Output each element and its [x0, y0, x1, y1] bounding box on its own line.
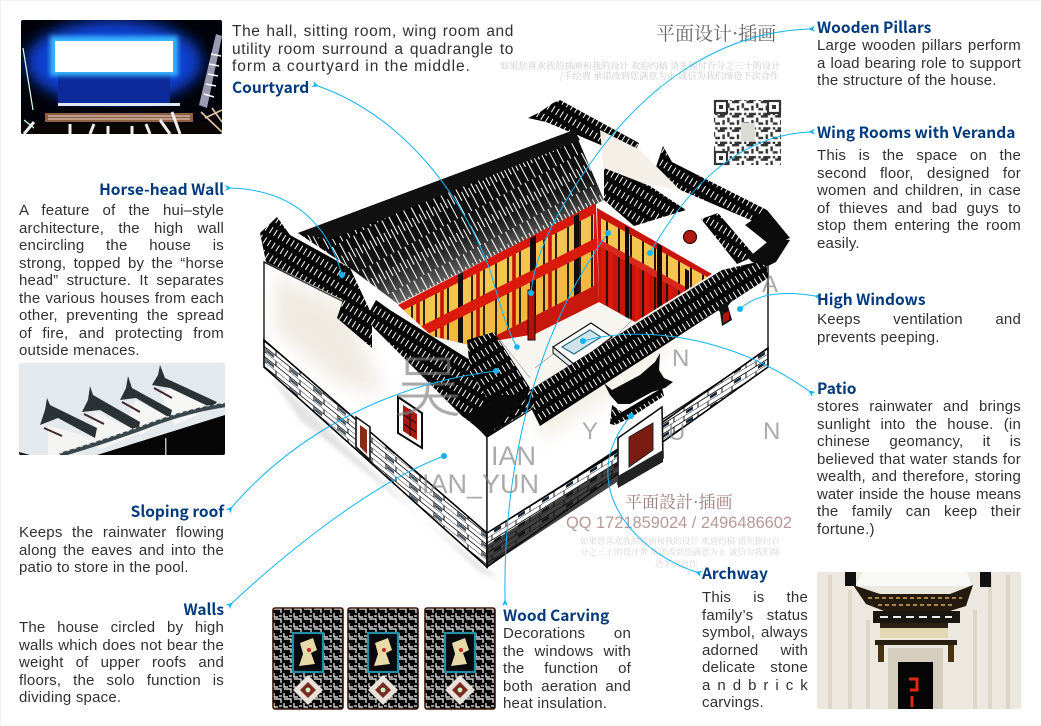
back rear gable strip	[528, 100, 639, 158]
leader lines and arrows	[231, 29, 815, 603]
watermark: top studio name: 如果您喜欢我的插画和我的设计 欢迎约稿 请先预付百分之三十的设计	[500, 58, 780, 72]
right wall	[487, 262, 768, 535]
watermark: top studio name: /手绘费 承诺改到您满意为止 诚信为我们缔造下次合作	[560, 68, 779, 82]
text: horse-head wall: head” structure. It separates	[19, 272, 224, 289]
text: walls: floors, the solo function is	[19, 672, 224, 689]
back right gable strip	[632, 146, 767, 222]
archway on right wall	[604, 353, 673, 488]
watermark: top studio name	[500, 19, 780, 82]
text: sloping roof: patio to store in the pool.	[19, 559, 189, 576]
text: patio: fortune.)	[817, 521, 875, 538]
wall weathering	[275, 275, 700, 440]
text: horse-head wall: architecture, the high wall	[19, 220, 224, 237]
watermark: contact block	[566, 488, 792, 570]
text: archway: a n d b r i c k	[702, 677, 808, 694]
house illustration	[260, 100, 790, 580]
watermark: contact block: 如果您喜欢我的插画和我的设计 欢迎约稿 请先预付百	[580, 535, 780, 547]
corner slope roof	[467, 332, 530, 420]
text: wing rooms: women and children, in case	[817, 182, 1021, 199]
text: archway: This is the	[702, 589, 808, 606]
heading: archway: Archway	[702, 562, 768, 584]
text: sloping roof: along the eaves and into the	[19, 542, 224, 559]
watermark: large letters over house: N	[672, 345, 689, 372]
text: patio: the family can keep their	[817, 503, 1021, 520]
text: sloping roof: Keeps the rainwater flowing	[19, 524, 224, 541]
text: walls: weight of upper roofs and	[19, 654, 224, 671]
horse head right end	[748, 238, 790, 266]
text: patio	[817, 398, 1021, 538]
arrow: courtyard	[318, 86, 517, 347]
arrow: sloping roof	[232, 371, 496, 507]
text: wing rooms: of thieves and bad guys to	[817, 200, 1021, 217]
arrow: wood carving	[505, 233, 608, 600]
main roof hatching	[298, 130, 604, 304]
right brick base	[487, 348, 768, 567]
heading: wing rooms: Wing Rooms with Veranda	[817, 121, 1015, 143]
heading: courtyard: Courtyard	[232, 76, 309, 98]
heading: wooden pillars: Wooden Pillars	[817, 16, 931, 38]
side gallery facade	[597, 208, 712, 322]
text: archway: adorned with	[702, 642, 808, 659]
text: wing rooms: second floor, designed for	[817, 165, 1021, 182]
arrow: horse-head wall	[231, 188, 342, 275]
courtyard floor	[432, 274, 712, 392]
text: wood carving: Decorations on	[503, 625, 631, 642]
text: walls: walls which does not bear the	[19, 637, 224, 654]
text: sloping roof	[19, 524, 224, 576]
photo: archway gate	[817, 572, 1021, 709]
text: patio: water inside the house means	[817, 486, 1021, 503]
text: courtyard description: form a courtyard in the middle.	[232, 58, 471, 75]
floor paving	[500, 320, 640, 378]
watermark: large letters over house: IAN_YUN	[422, 469, 539, 499]
text: wood carving	[503, 625, 631, 712]
text: wood carving: the function of	[503, 660, 631, 677]
round red window	[684, 230, 696, 244]
text: patio: believed that water stands for	[817, 451, 1021, 468]
text: horse-head wall: other, preventing the spread	[19, 307, 224, 324]
arrow: wooden pillars	[531, 29, 809, 293]
text: wood carving: both aeration and	[503, 678, 631, 695]
text: wooden pillars: Large wooden pillars perform	[817, 37, 1021, 54]
watermark: contact block: 造下次合作	[655, 558, 698, 570]
text: patio: wealth, and therefore, storing	[817, 468, 1021, 485]
watermark: contact block: 平面設計·插画	[625, 488, 733, 513]
text: horse-head wall: outside menaces.	[19, 342, 140, 359]
heading: horse-head wall: Horse-head Wall	[99, 178, 224, 200]
text: horse-head wall: of fire, and protecting from	[19, 325, 224, 342]
text: wing rooms: easily.	[817, 235, 860, 252]
text: walls: The house circled by high	[19, 619, 224, 636]
back gallery facade	[398, 203, 599, 344]
ground shadow	[270, 375, 500, 580]
inner white gable wall	[636, 213, 749, 274]
arrow: wing rooms	[650, 132, 809, 253]
text: archway	[702, 589, 808, 711]
watermark: large letters over house: A	[762, 271, 778, 298]
text: patio: sunlight into the house. (in	[817, 416, 1021, 433]
watermark: large letters over house: N	[763, 418, 780, 445]
watermark: contact block: 分之三十的设计费 承诺改到您满意为止 诚信为我们缔	[580, 546, 780, 558]
text: wood carving: heat insulation.	[503, 695, 607, 712]
text: archway: carvings.	[702, 694, 764, 711]
text: horse-head wall: the various houses from each	[19, 290, 224, 307]
photo: horse-head walls	[19, 363, 225, 455]
left facade window	[398, 397, 422, 448]
text: courtyard description: utility room surround a quadrangle to	[232, 41, 514, 58]
front right roof strip	[526, 260, 768, 426]
anchor dots	[339, 230, 743, 459]
patio pool	[553, 323, 612, 371]
text: walls	[19, 619, 224, 706]
arrow: patio	[583, 334, 809, 391]
heading: walls: Walls	[183, 598, 224, 620]
QR code	[714, 100, 781, 165]
text: horse-head wall	[19, 202, 224, 359]
text: wing rooms: This is the space on the	[817, 147, 1021, 164]
text: patio: stores rainwater and brings	[817, 398, 1021, 415]
text: archway: delicate stone	[702, 659, 808, 676]
watermark: large letters over house: Y	[582, 418, 598, 445]
left wall	[264, 262, 487, 540]
text: patio: chinese geomancy, it is	[817, 433, 1021, 450]
high window	[716, 298, 734, 326]
watermark: contact block: QQ 1721859024 / 2496486602	[566, 514, 792, 532]
text: wooden pillars: the structure of the house.	[817, 72, 997, 89]
watermark: large letters over house: U	[668, 419, 685, 446]
text: horse-head wall: strong, topped by the “horse	[19, 255, 224, 272]
main roof ridge	[298, 130, 580, 240]
text: horse-head wall: A feature of the hui–style	[19, 202, 224, 219]
dark lower right base	[487, 462, 617, 567]
text: walls: dividing space.	[19, 689, 121, 706]
photo: wood carving panels	[273, 608, 495, 709]
heading: high windows: High Windows	[817, 288, 926, 310]
photo: courtyard skylight	[21, 20, 222, 134]
text: wooden pillars	[817, 37, 1021, 89]
text: archway: family’s status	[702, 607, 808, 624]
main pillar	[528, 290, 535, 340]
front left roof strip	[366, 300, 536, 436]
heading: wood carving: Wood Carving	[503, 604, 609, 626]
watermark: large letters over house	[394, 271, 780, 499]
left gable horse-head	[260, 217, 372, 348]
watermark: large letters over house: 吴	[394, 332, 462, 431]
front corner eave	[464, 395, 530, 437]
text: horse-head wall: encircling the house is	[19, 237, 224, 254]
arrow: walls	[232, 456, 444, 603]
back right wall wedge	[600, 130, 680, 190]
left brick base	[264, 340, 487, 567]
text: high windows: Keeps ventilation and	[817, 311, 1021, 328]
text: wood carving: the windows with	[503, 643, 631, 660]
heading: sloping roof: Sloping roof	[131, 500, 224, 522]
text: courtyard description: The hall, sitting room, wing room and	[232, 23, 514, 40]
back right horse head	[745, 210, 790, 245]
right hatch slope	[701, 213, 755, 264]
text: archway: symbol, always	[702, 624, 808, 641]
right upper roof	[604, 168, 686, 226]
text: high windows	[817, 311, 1021, 346]
text: courtyard description	[232, 23, 514, 75]
arrow: high windows	[740, 294, 815, 309]
heading: patio: Patio	[817, 377, 857, 399]
text: wing rooms: stop them entering the room	[817, 217, 1021, 234]
text: wooden pillars: a load bearing role to support	[817, 55, 1021, 72]
main back roof	[298, 130, 604, 304]
small side door	[356, 417, 370, 460]
watermark: large letters over house: IAN	[491, 441, 536, 471]
arrow: archway	[608, 416, 696, 572]
text: wing rooms	[817, 147, 1021, 252]
text: high windows: prevents peeping.	[817, 329, 940, 346]
watermark: top studio name: 平面设计·插画	[656, 19, 776, 46]
